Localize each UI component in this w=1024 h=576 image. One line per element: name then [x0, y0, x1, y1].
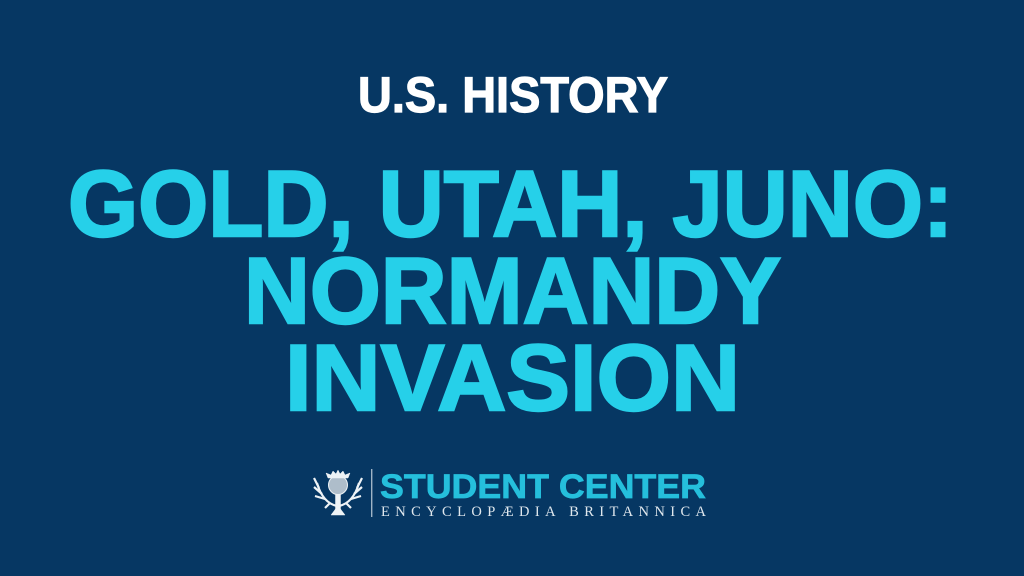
thistle flower head [328, 476, 348, 494]
thistle branches and leaves [314, 478, 362, 508]
divider [371, 469, 372, 517]
title [68, 151, 953, 430]
thistle crown [326, 470, 350, 478]
title line 1: GOLD, UTAH, JUNO: [68, 151, 953, 256]
title line 3: INVASION [285, 325, 740, 430]
logo: Student Center, Encyclopaedia Britannica [314, 468, 707, 520]
title line 2: NORMANDY [244, 238, 781, 343]
thistle stem and base [331, 494, 345, 515]
heading: U.S. History: U.S. HISTORY [358, 67, 668, 123]
wordmark: Encyclopaedia Britannica: ENCYCLOPÆDIA BRITANNICA [381, 504, 707, 520]
wordmark: Student Center: STUDENT CENTER [380, 468, 706, 506]
icon: Britannica thistle [314, 470, 362, 515]
